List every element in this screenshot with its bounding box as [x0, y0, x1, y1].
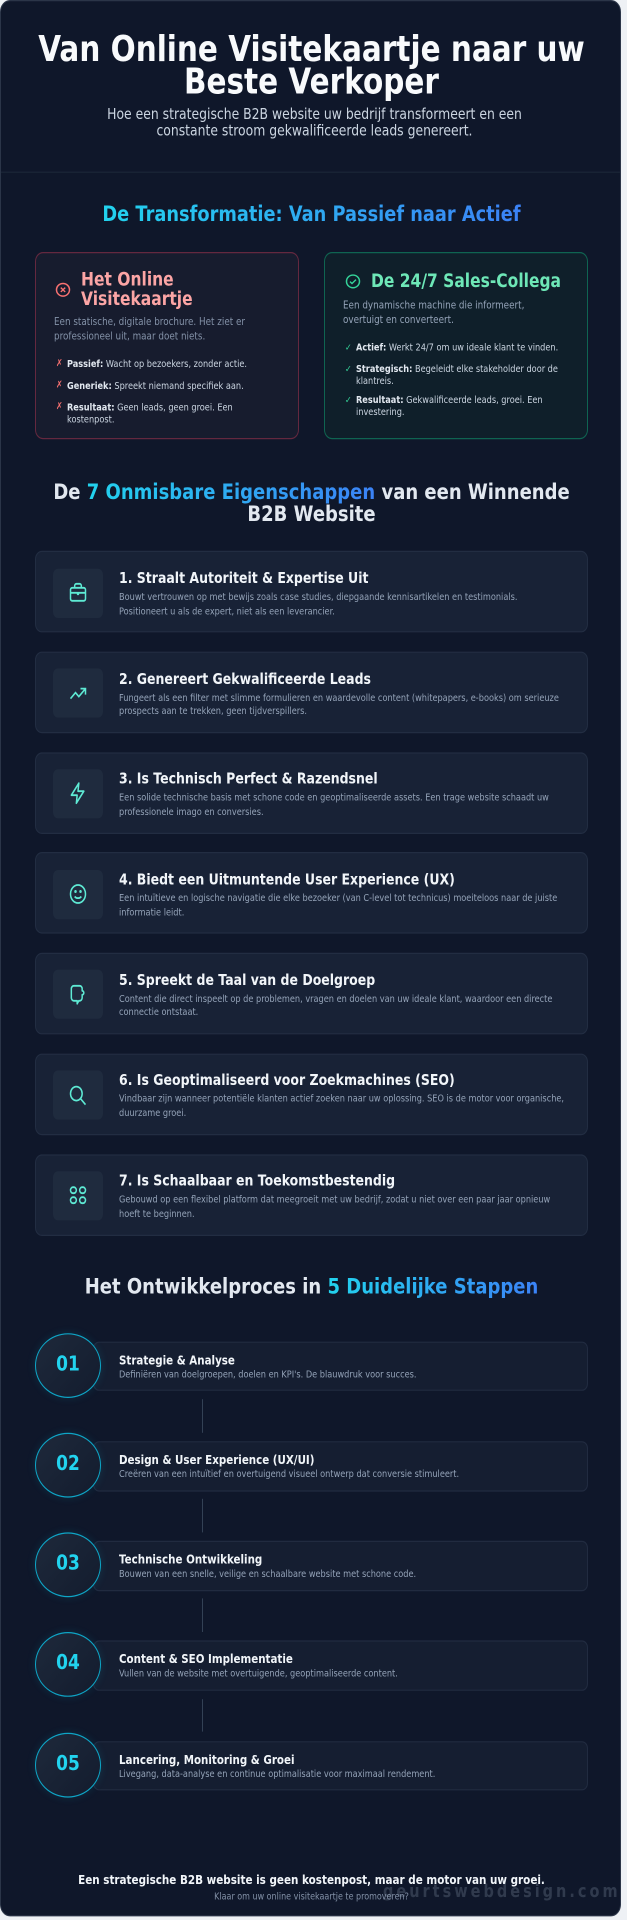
bullets: Generiek: Spreekt niemand specifiek aan. — [67, 379, 244, 391]
feature 7: hoeft te beginnen. — [119, 1207, 195, 1219]
heading: 7 eigenschappen: B2B Website — [247, 501, 376, 526]
bullets: Actief: Werkt 24/7 om uw ideale klant te vinden. — [356, 340, 558, 352]
step 1 — [93, 1341, 588, 1391]
icon: lightning — [53, 769, 103, 818]
bullets: Resultaat: Gekwalificeerde leads, groei. Een — [356, 393, 543, 405]
step 2: Creëren van een intuïtief en overtuigend visueel ontwerp dat conversie stimuleert. — [119, 1467, 459, 1479]
feature 3: Een solide technische basis met schone code en geoptimaliseerde assets. Een trage website schaadt uw — [119, 791, 549, 803]
feature 4 — [35, 852, 588, 934]
step 3: Technische Ontwikkeling — [119, 1553, 262, 1567]
feature 1: 1. Straalt Autoriteit & Expertise Uit — [119, 569, 368, 587]
feature 3 — [35, 752, 588, 834]
feature 7: 7. Is Schaalbaar en Toekomstbestendig — [119, 1171, 395, 1189]
step 2 — [93, 1441, 588, 1491]
step 2: Design & User Experience (UX/UI) — [119, 1453, 314, 1467]
icon: x circle — [56, 282, 70, 297]
step 2 number — [35, 1433, 101, 1497]
icon: trend up — [53, 669, 103, 718]
step 5 number — [35, 1732, 101, 1797]
feature 3: 3. Is Technisch Perfect & Razendsnel — [119, 770, 378, 788]
icon: smiley — [53, 870, 103, 919]
bullets: Strategisch: Begeleidt elke stakeholder door de — [356, 362, 558, 374]
feature 3: professionele imago en conversies. — [119, 805, 264, 817]
step 5: Livegang, data-analyse en continue optimalisatie voor maximaal rendement. — [119, 1767, 435, 1779]
subtitle: constante stroom gekwalificeerde leads genereert. — [156, 121, 472, 139]
heading: 7 eigenschappen — [53, 480, 570, 526]
icon: search — [53, 1071, 103, 1120]
bullets: Resultaat: Geen leads, geen groei. Een — [67, 400, 233, 412]
description — [343, 300, 524, 326]
footer subline: Klaar om uw online visitekaartje te promoveren? — [214, 1891, 409, 1902]
feature 5: 5. Spreekt de Taal van de Doelgroep — [119, 971, 375, 989]
title: Beste Verkoper — [184, 61, 439, 101]
step 1 number — [35, 1333, 101, 1398]
step 1: Definiëren van doelgroepen, doelen en KPI's. De blauwdruk voor succes. — [119, 1368, 416, 1380]
step 1 number: 01 — [56, 1352, 80, 1376]
heading: Het Online — [81, 269, 174, 290]
feature 6: Vindbaar zijn wanneer potentiële klanten actief zoeken naar uw oplossing. SEO is de motor voor organische, — [119, 1092, 564, 1104]
feature 1: Bouwt vertrouwen op met bewijs zoals case studies, diepgaande kennisartikelen en testimonials. — [119, 590, 517, 602]
icon: briefcase — [53, 568, 103, 618]
heading: De 24/7 Sales-Collega — [371, 270, 561, 292]
bullets: ✗ — [56, 379, 63, 390]
feature 2: 2. Genereert Gekwalificeerde Leads — [119, 669, 371, 687]
description: Een dynamische machine die informeert, — [343, 300, 524, 312]
step 5 — [93, 1741, 588, 1791]
step 3 number: 03 — [56, 1552, 80, 1576]
icon: chat — [53, 970, 103, 1019]
bullets: ✗ — [56, 401, 63, 412]
bullets: ✓ — [345, 342, 352, 353]
heading: 7 eigenschappen: De 7 Onmisbare Eigenschappen van een Winnende — [53, 480, 570, 505]
bullets: ✗ — [56, 358, 63, 368]
panel: online visitekaartje — [35, 252, 299, 439]
icon: check circle — [346, 274, 360, 288]
heading: Visitekaartje — [81, 288, 193, 310]
feature 7: Gebouwd op een flexibel platform dat meegroeit met uw bedrijf, zodat u niet over een paar jaar opnieuw — [119, 1193, 550, 1205]
feature 2 — [35, 652, 588, 733]
heading: transformatie: De Transformatie: Van Passief naar Actief — [102, 202, 521, 227]
title — [38, 29, 585, 101]
bullets: klantreis. — [356, 375, 394, 387]
step 2 number: 02 — [56, 1452, 80, 1476]
feature 7 — [35, 1154, 588, 1235]
step 3 number — [35, 1533, 101, 1597]
step 4 number: 04 — [56, 1652, 80, 1676]
heading: ontwikkelproces: Het Ontwikkelproces in 5 Duidelijke Stappen — [85, 1274, 538, 1300]
step 4 — [93, 1641, 588, 1691]
feature 2: prospects aan te trekken, geen tijdverspillers. — [119, 705, 307, 717]
feature 5 — [35, 953, 588, 1035]
feature 6 — [35, 1053, 588, 1135]
step 4 number — [35, 1632, 101, 1697]
feature 6: duurzame groei. — [119, 1107, 186, 1119]
feature 4: informatie leidt. — [119, 906, 184, 918]
bullets: investering. — [356, 406, 404, 418]
step 4: Vullen van de website met overtuigende, geoptimaliseerde content. — [119, 1667, 398, 1679]
description — [54, 317, 245, 343]
watermark: geurtswebdesign.com — [383, 1883, 621, 1902]
step 4: Content & SEO Implementatie — [119, 1653, 293, 1667]
step 3 — [93, 1541, 588, 1591]
feature 6: 6. Is Geoptimaliseerd voor Zoekmachines (SEO) — [119, 1071, 455, 1089]
step 5: Lancering, Monitoring & Groei — [119, 1753, 294, 1767]
description: Een statische, digitale brochure. Het ziet er — [54, 317, 245, 329]
feature 5: connectie ontstaat. — [119, 1006, 198, 1018]
subtitle — [107, 104, 522, 139]
step 5 number: 05 — [56, 1751, 80, 1775]
subtitle: Hoe een strategische B2B website uw bedrijf transformeert en een — [107, 104, 522, 122]
feature 2: Fungeert als een filter met slimme formulieren en waardevolle content (whitepapers, e-books) om serieuze — [119, 691, 559, 703]
panel: sales-collega — [324, 252, 588, 439]
description: professioneel uit, maar doet niets. — [54, 331, 205, 343]
bullets: ✓ — [345, 395, 352, 406]
feature 1: Positioneert u als de expert, niet als een leverancier. — [119, 604, 335, 616]
feature 1 — [35, 551, 588, 633]
icon: grid — [53, 1171, 103, 1220]
feature 4: Een intuïtieve en logische navigatie die elke bezoeker (van C-level tot technicus) moeiteloos naar de juiste — [119, 892, 557, 904]
title: Van Online Visitekaartje naar uw — [38, 29, 585, 70]
footer statement: Een strategische B2B website is geen kostenpost, maar de motor van uw groei. — [78, 1873, 545, 1888]
bullets — [345, 340, 558, 418]
bullets: Passief: Wacht op bezoekers, zonder actie. — [67, 357, 247, 369]
step 1: Strategie & Analyse — [119, 1353, 235, 1368]
feature 5: Content die direct inspeelt op de problemen, vragen en doelen van uw ideale klant, waardoor een directe — [119, 992, 552, 1004]
heading — [81, 269, 193, 310]
description: overtuigt en converteert. — [343, 314, 454, 326]
bullets: kostenpost. — [67, 413, 114, 425]
step 3: Bouwen van een snelle, veilige en schaalbare website met schone code. — [119, 1567, 416, 1579]
bullets: ✓ — [345, 364, 352, 374]
feature 4: 4. Biedt een Uitmuntende User Experience (UX) — [119, 870, 455, 888]
bullets — [56, 357, 247, 425]
